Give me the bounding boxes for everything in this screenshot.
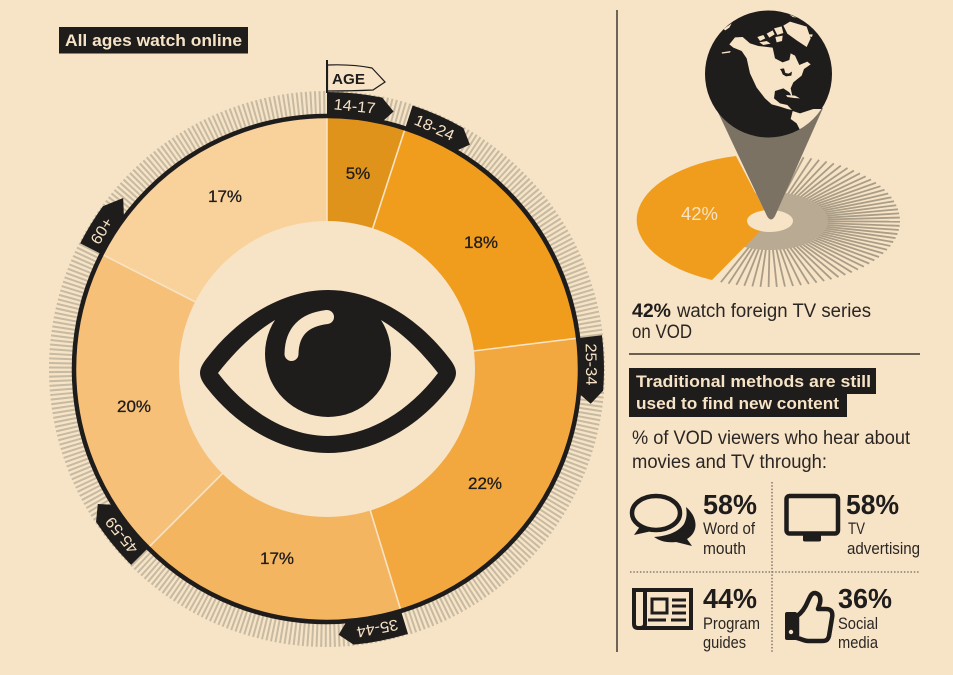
segment: 14-17 (327, 115, 406, 369)
heading: all ages watch online (59, 27, 248, 54)
label: 35-44 (336, 606, 408, 653)
text: 42% watch foreign TV series on VOD (632, 301, 871, 343)
stat: word of mouth: mouth (703, 540, 746, 558)
icon: newspaper (634, 590, 691, 628)
stat: program guides (634, 583, 760, 652)
value: 5%: 5% (346, 164, 370, 183)
label: 60+: 60+ (88, 215, 117, 248)
text: 42% watch foreign TV series on VOD: 42% (632, 301, 671, 322)
label: 35-44: 35-44 (355, 615, 400, 640)
stat: TV advertising: 58% (846, 489, 899, 520)
pin base (747, 210, 793, 232)
value: 42%: 42% (681, 204, 718, 224)
label: 45-59 (84, 497, 152, 565)
stat: TV advertising (786, 489, 920, 558)
stat: TV advertising: TV (848, 520, 865, 538)
flag: age (327, 60, 385, 93)
value: 17%: 17% (260, 549, 294, 568)
ray disc: remaining share (721, 157, 900, 287)
stat: social media: media (838, 634, 879, 652)
heading: all ages watch online: All ages watch online (65, 31, 242, 50)
label: 25-34: 25-34 (582, 343, 599, 386)
label: 14-17: 14-17 (333, 96, 376, 118)
segment: 60+ (101, 115, 327, 369)
stat: TV advertising: advertising (847, 540, 920, 558)
value: 20%: 20% (117, 397, 151, 416)
heading: traditional methods: used to find new content (636, 394, 839, 413)
label: 60+ (80, 190, 131, 255)
stat: word of mouth (632, 489, 757, 558)
stat: social media (785, 583, 892, 652)
text: survey intro (632, 428, 911, 473)
donut chart: age groups (61, 103, 593, 635)
heading: traditional methods: Traditional methods are still (636, 372, 871, 391)
label: 18-24: 18-24 (412, 112, 457, 145)
text: survey intro: movies and TV through: (632, 452, 827, 473)
stat: word of mouth: 58% (703, 489, 757, 520)
stat: social media: Social (838, 615, 878, 633)
icon: thumbs up (785, 593, 832, 641)
stat: social media: 36% (838, 583, 892, 614)
text: 42% watch foreign TV series on VOD: watch foreign TV series (676, 301, 871, 322)
heading: traditional methods (629, 368, 876, 417)
icon: television (786, 496, 838, 542)
pin cone (716, 108, 823, 220)
globe: North America (705, 10, 832, 138)
stat: program guides: guides (703, 634, 746, 652)
value: 22%: 22% (468, 474, 502, 493)
label: 45-59: 45-59 (102, 513, 142, 556)
panel: foreign TV map pin (637, 10, 900, 287)
label: 18-24 (404, 106, 476, 154)
text: 42% watch foreign TV series on VOD: on VOD (632, 322, 692, 343)
vertical divider (616, 10, 618, 652)
stat: word of mouth: Word of (703, 520, 755, 538)
stat: program guides: 44% (703, 583, 757, 614)
icon: eye (200, 290, 456, 453)
label: 14-17 (327, 92, 394, 121)
flag: age: AGE (332, 71, 365, 88)
segment: 25-34 (327, 338, 581, 612)
icon: speech bubbles (632, 496, 696, 546)
text: survey intro: % of VOD viewers who hear about (632, 428, 911, 449)
label: 25-34 (573, 335, 610, 405)
segment: 35-44 (147, 369, 401, 623)
segment: 18-24 (327, 127, 579, 369)
segment: 45-59 (73, 254, 327, 549)
solid centre of ray disc (712, 192, 828, 250)
stat: program guides: Program (703, 615, 760, 633)
orange sector: 42% (637, 156, 770, 280)
value: 18%: 18% (464, 233, 498, 252)
value: 17%: 17% (208, 187, 242, 206)
horizontal divider (629, 353, 920, 355)
